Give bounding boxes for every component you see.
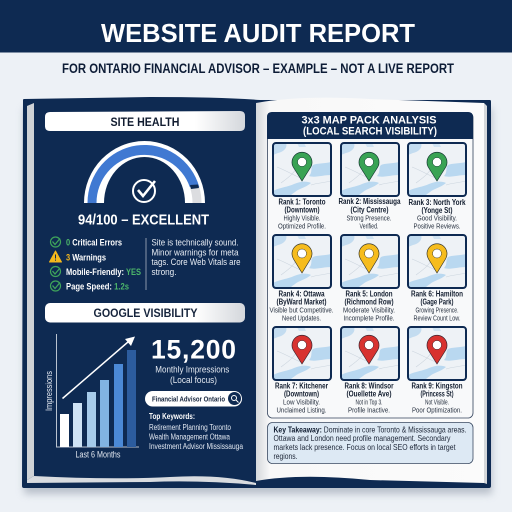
map card: rank 3: Rank 3: North York bbox=[408, 198, 466, 207]
map card: rank 6: Review Count Low. bbox=[414, 314, 460, 322]
map card: rank 8: Not in Top 3. bbox=[356, 398, 382, 406]
map card: rank 5: (Richmond Row) bbox=[344, 298, 394, 306]
score: 94/100 – EXCELLENT bbox=[78, 212, 209, 228]
map card: rank 2 bbox=[338, 143, 401, 230]
map card: rank 1: Optimized Profile. bbox=[278, 222, 326, 230]
map card: rank 9: Poor Optimization. bbox=[412, 406, 462, 414]
map card: rank 5: Rank 5: London bbox=[346, 290, 393, 298]
health summary: tags. Core Web Vitals are bbox=[152, 257, 240, 267]
big number: 15,200 bbox=[151, 334, 236, 364]
heading: site health: SITE HEALTH bbox=[110, 117, 180, 129]
map card: rank 4: (ByWard Market) bbox=[276, 298, 327, 306]
panel: map pack analysis bbox=[267, 112, 473, 418]
map card: rank 6: Growing Presence. bbox=[416, 306, 458, 314]
map card: rank 1: (Downtown) bbox=[284, 206, 320, 214]
status list bbox=[50, 237, 141, 292]
x axis label: Last 6 Months bbox=[76, 450, 121, 460]
right page bbox=[256, 98, 484, 483]
map card: rank 7: Rank 7: Kitchener bbox=[275, 382, 328, 390]
y axis label: Impressions bbox=[44, 371, 54, 411]
map card: rank 8 bbox=[341, 327, 399, 414]
map card: rank 9: Not Visible. bbox=[425, 398, 449, 406]
callout: key takeaway: regions. bbox=[274, 451, 298, 461]
map card: rank 7: Low Visibility. bbox=[283, 398, 320, 406]
top keywords: Wealth Management Ottawa bbox=[149, 432, 230, 442]
health summary: strong. bbox=[152, 267, 176, 277]
map card: rank 6 bbox=[408, 235, 466, 322]
left page edge bbox=[27, 103, 34, 480]
map card: rank 7: (Downtown) bbox=[284, 390, 319, 398]
icon: search bbox=[228, 392, 241, 405]
callout: key takeaway: Ottawa and London need profile management. Secondary bbox=[274, 433, 451, 443]
right page edge bbox=[484, 103, 487, 484]
map card: rank 8: (Ouellette Ave) bbox=[346, 390, 392, 398]
search bar: Financial Advisor Ontario bbox=[152, 394, 225, 404]
callout: key takeaway: Key Takeaway: Dominate in core Toronto & Mississauga areas. bbox=[274, 424, 502, 434]
map pack heading: (LOCAL SEARCH VISIBILITY) bbox=[303, 126, 437, 138]
map card: rank 5: Incomplete Profile. bbox=[344, 314, 394, 322]
map card: rank 3: (Yonge St) bbox=[422, 206, 453, 215]
health summary: Site is technically sound. bbox=[152, 238, 238, 248]
top keywords bbox=[149, 412, 243, 451]
top keywords: Investment Advisor Mississauga bbox=[149, 442, 243, 451]
item: mobile friendly: Mobile-Friendly: YES bbox=[66, 267, 141, 278]
book cover bbox=[22, 97, 491, 488]
map card: rank 6: Rank 6: Hamilton bbox=[411, 290, 463, 298]
map card: rank 4: Visible but Competitive. bbox=[270, 306, 334, 314]
arrow: upward trend bbox=[62, 336, 135, 398]
item: warnings: 3 Warnings bbox=[66, 252, 106, 264]
callout: key takeaway: markets lack presence. Focus on local SEO efforts in target bbox=[274, 442, 456, 452]
map pack heading: 3x3 MAP PACK ANALYSIS bbox=[301, 114, 436, 126]
item: critical errors: 0 Critical Errors bbox=[66, 238, 122, 248]
search bar bbox=[145, 391, 242, 406]
map pack heading bbox=[267, 112, 473, 139]
map card: rank 5: Moderate Visibility. bbox=[343, 306, 395, 314]
metric label: Monthly Impressions bbox=[155, 364, 230, 374]
title: WEBSITE AUDIT REPORT bbox=[101, 18, 415, 48]
map card: rank 4: Rank 4: Ottawa bbox=[278, 290, 325, 298]
map card: rank 2: Rank 2: Mississauga bbox=[338, 197, 401, 206]
heading: site health bbox=[45, 111, 245, 131]
item: page speed: Page Speed: 1.2s bbox=[66, 282, 129, 292]
map card: rank 3 bbox=[408, 143, 466, 230]
map card: rank 8: Rank 8: Windsor bbox=[344, 382, 394, 390]
panel: site health bbox=[45, 111, 245, 292]
open book bbox=[22, 97, 492, 494]
map card: rank 6: (Gage Park) bbox=[420, 298, 454, 306]
top keywords: Retirement Planning Toronto bbox=[149, 423, 231, 432]
map card: rank 2: (City Centre) bbox=[350, 206, 389, 214]
map card: rank 9 bbox=[408, 327, 466, 414]
map card: rank 8: Profile Inactive. bbox=[348, 406, 390, 414]
map card: rank 1 bbox=[273, 143, 331, 230]
map card: rank 1: Highly Visible. bbox=[284, 214, 320, 222]
map card: rank 2: Verified. bbox=[360, 222, 378, 230]
icon: check circle bbox=[133, 180, 155, 202]
map card: rank 5 bbox=[341, 235, 399, 322]
map card: rank 4 bbox=[270, 235, 334, 322]
map card: rank 9: Rank 9: Kingston bbox=[412, 382, 463, 390]
book shadow bbox=[24, 108, 492, 494]
panel: google visibility bbox=[44, 303, 245, 460]
map card: rank 7: Unclaimed Listing. bbox=[276, 406, 326, 414]
map card: rank 9: (Princess St) bbox=[420, 390, 454, 398]
map card: rank 7 bbox=[273, 327, 331, 414]
map card: rank 1: Rank 1: Toronto bbox=[278, 198, 326, 206]
heading: google visibility bbox=[45, 303, 245, 322]
heading: google visibility: GOOGLE VISIBILITY bbox=[94, 308, 198, 320]
header banner bbox=[0, 0, 512, 52]
map card: rank 3: Positive Reviews. bbox=[414, 222, 460, 230]
bar chart bbox=[44, 334, 139, 460]
map card: rank 3: Good Visibility. bbox=[417, 214, 457, 222]
metric label: (Local focus) bbox=[170, 375, 217, 385]
map card: rank 4: Need Updates. bbox=[282, 314, 321, 322]
health summary: Minor warnings for meta bbox=[152, 248, 238, 258]
gauge bbox=[84, 141, 205, 203]
left page curled bottom bbox=[27, 476, 256, 485]
callout: key takeaway bbox=[268, 422, 473, 464]
top keywords: Top Keywords: bbox=[149, 412, 195, 421]
map card: rank 2: Strong Presence. bbox=[346, 214, 392, 222]
